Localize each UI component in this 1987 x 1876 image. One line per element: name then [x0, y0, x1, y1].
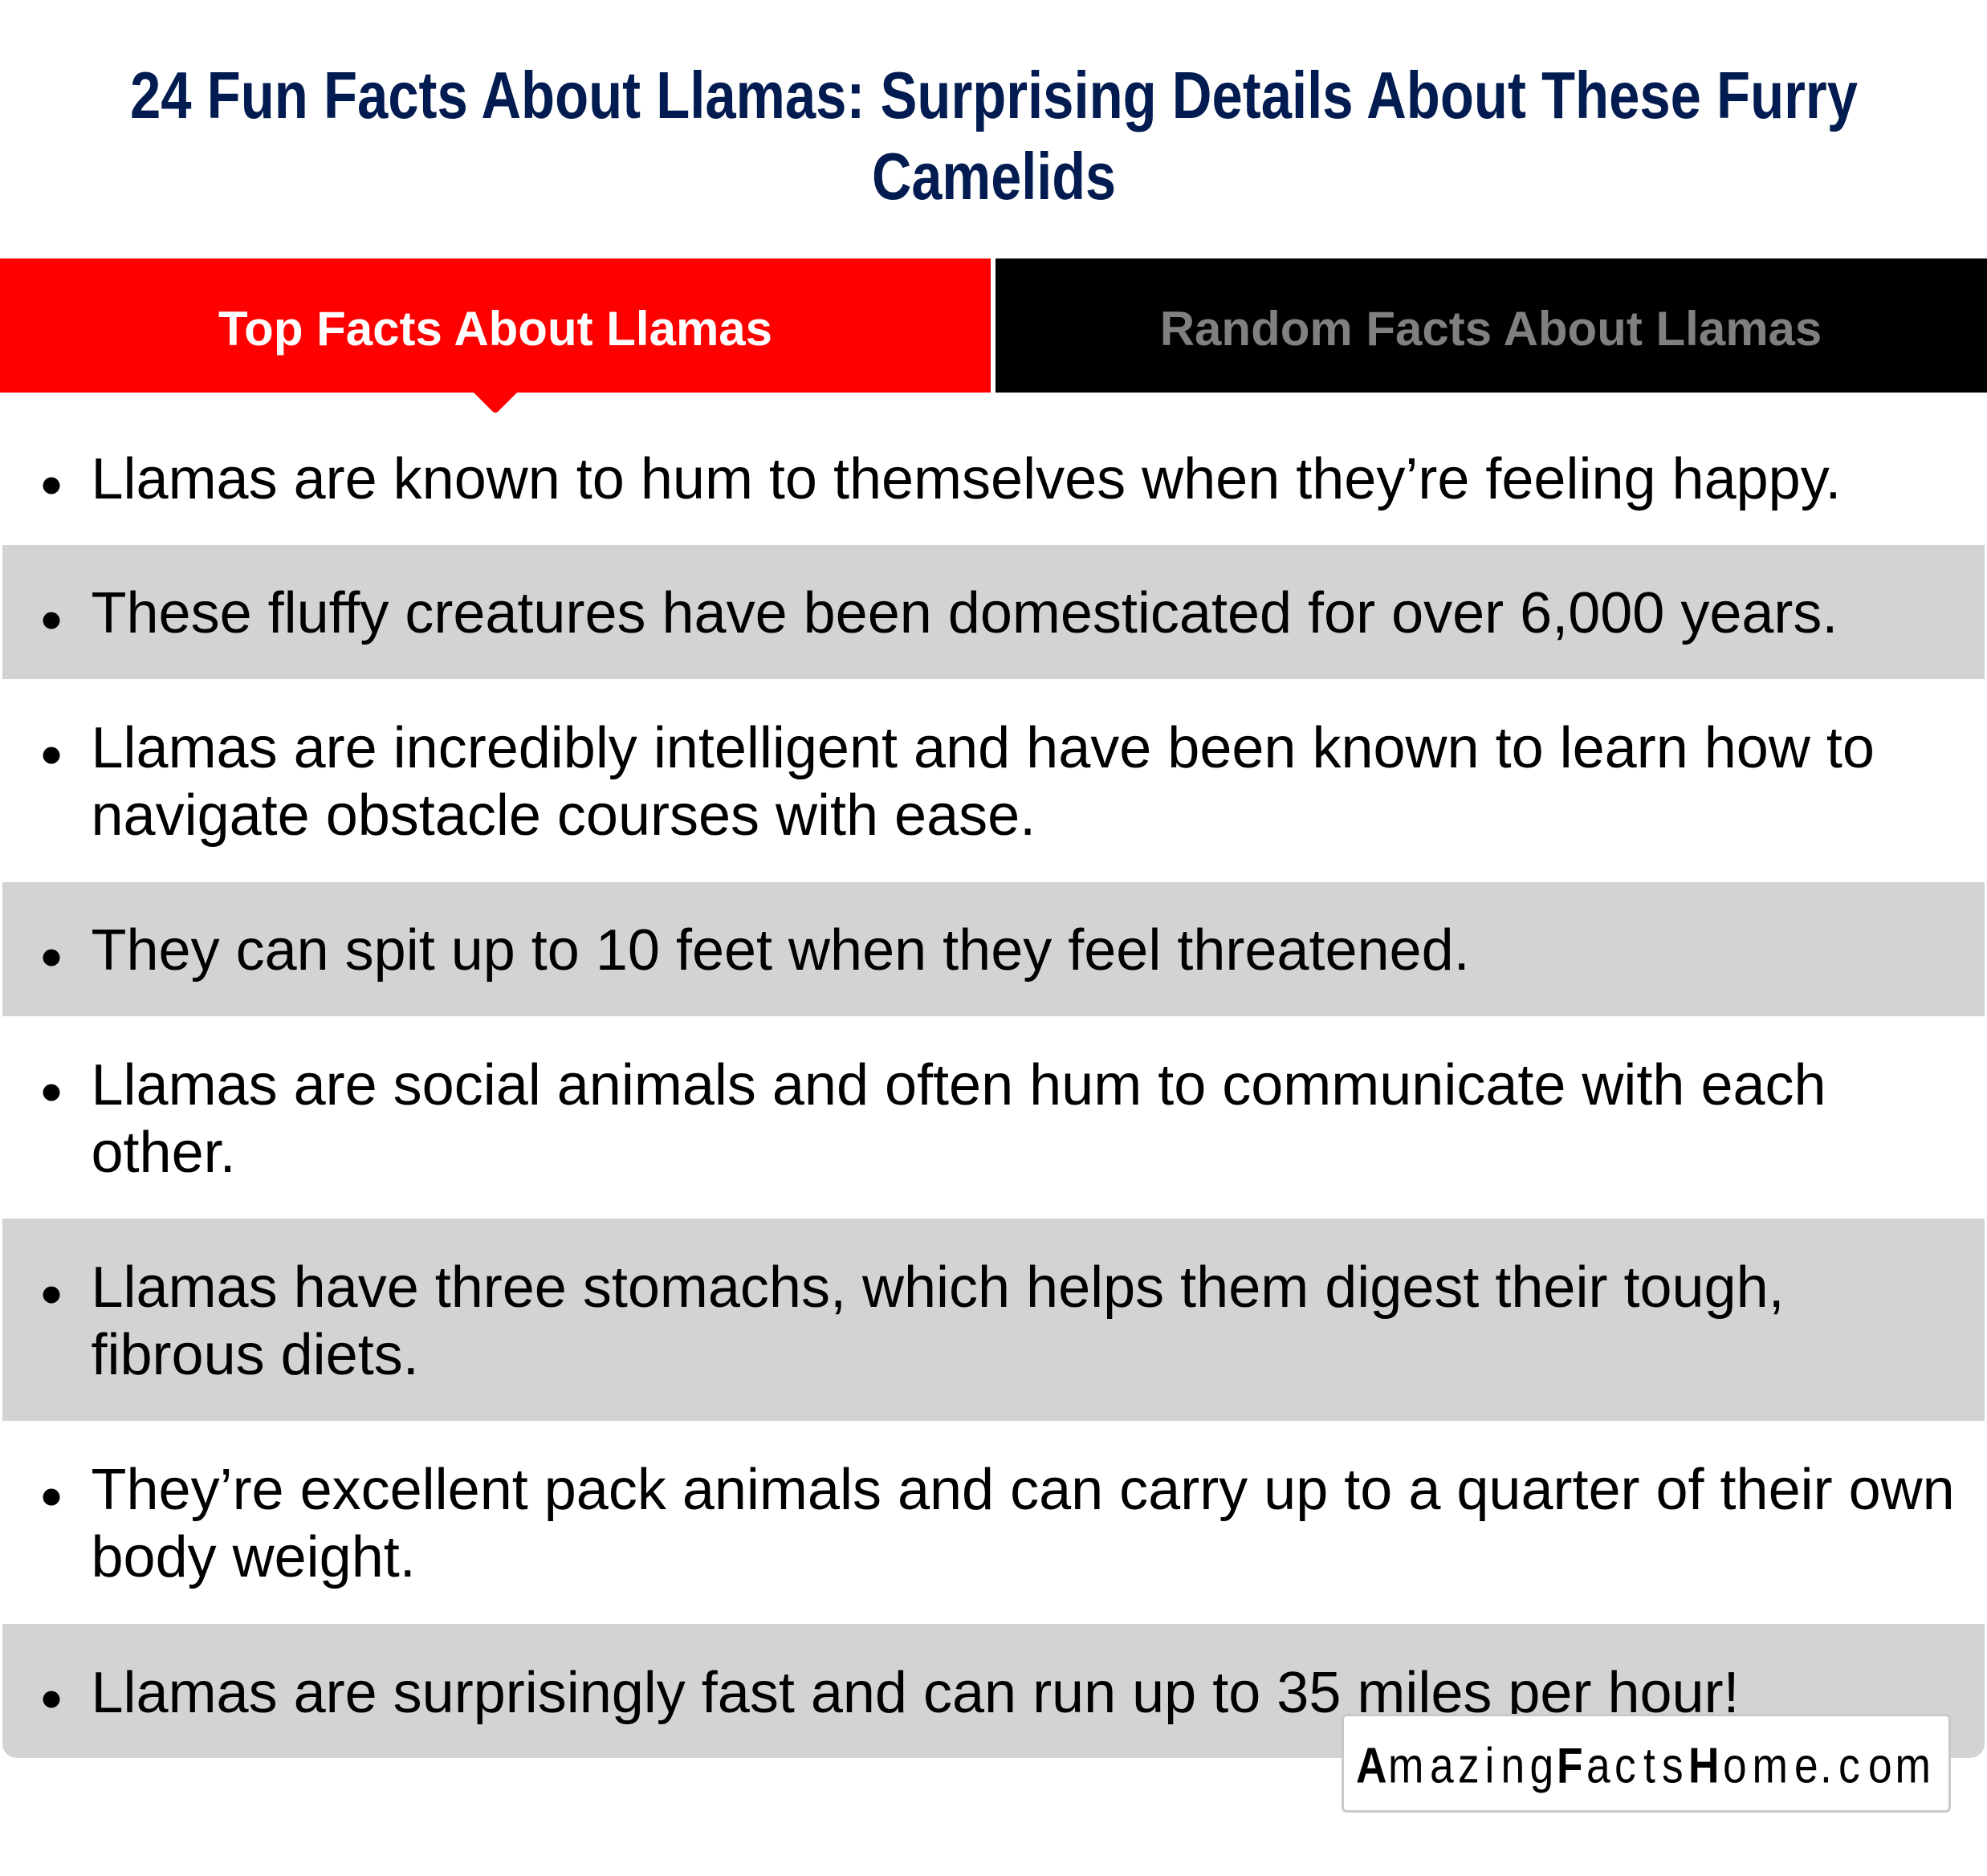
fact 6: [2, 1219, 1985, 1421]
fact 5: other.: [92, 1121, 236, 1185]
fact 4: [2, 882, 1985, 1016]
fact 3: Llamas are incredibly intelligent and have been known to learn how to: [92, 716, 1875, 780]
fact 6: fibrous diets.: [92, 1323, 419, 1387]
fact 4: They can spit up to 10 feet when they feel threatened.: [92, 918, 1470, 983]
fact 7: [43, 1458, 1955, 1589]
fact 2: [2, 545, 1985, 679]
tab: top facts (active): [0, 258, 991, 413]
tab: random facts (inactive): [996, 258, 1987, 393]
fact 7: They’re excellent pack animals and can carry up to a quarter of their own: [92, 1458, 1955, 1522]
fact 3: [43, 716, 1875, 848]
watermark: AmazingFactsHome.com: [1356, 1739, 1931, 1793]
fact 8: [2, 1624, 1985, 1758]
title: [130, 58, 1858, 214]
fact 1: Llamas are known to hum to themselves when they’re feeling happy.: [92, 447, 1841, 511]
fact 8: Llamas are surprisingly fast and can run up to 35 miles per hour!: [92, 1661, 1740, 1725]
fact 7: body weight.: [92, 1525, 416, 1589]
fact 6: Llamas have three stomachs, which helps them digest their tough,: [92, 1255, 1785, 1320]
title: Camelids: [872, 139, 1116, 214]
fact 5: [43, 1053, 1826, 1185]
fact 3: navigate obstacle courses with ease.: [92, 783, 1036, 848]
fact 5: Llamas are social animals and often hum to communicate with each: [92, 1053, 1826, 1117]
tab: top facts (active): Top Facts About Llamas: [218, 302, 772, 356]
fact 2: These fluffy creatures have been domesticated for over 6,000 years.: [92, 581, 1838, 645]
watermark: [1342, 1715, 1949, 1811]
tab: random facts (inactive): Random Facts About Llamas: [1160, 302, 1822, 356]
